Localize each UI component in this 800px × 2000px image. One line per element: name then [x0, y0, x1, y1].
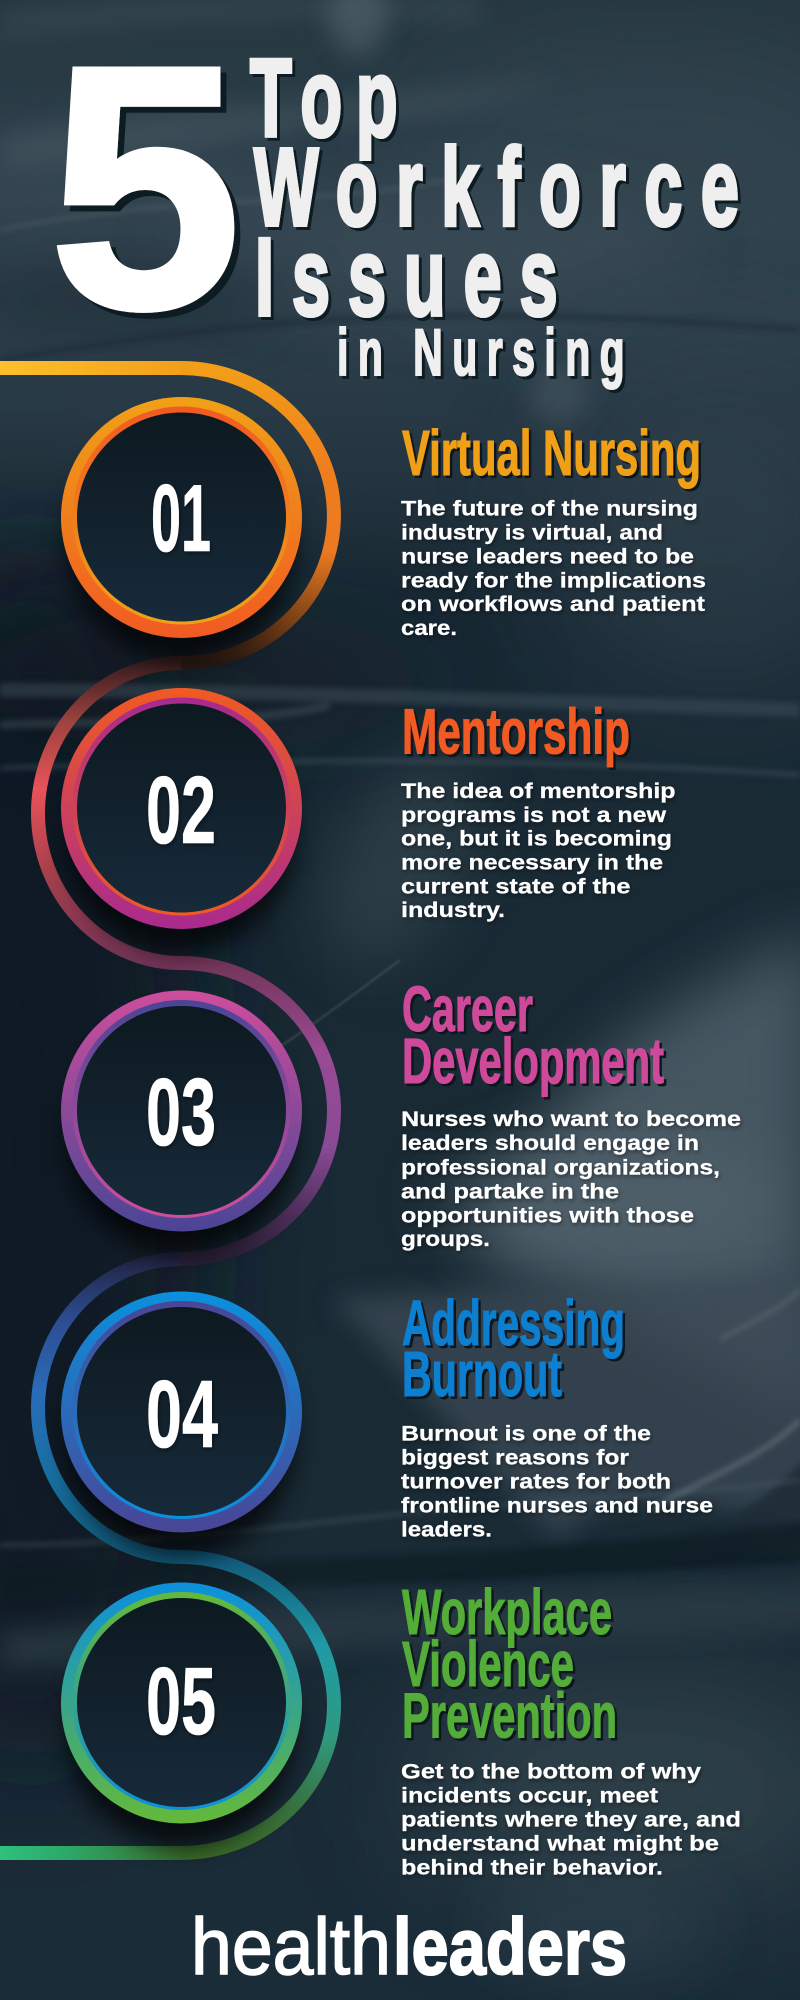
item 05: body: patients where they are, and	[401, 1808, 741, 1832]
item 04: body: turnover rates for both	[401, 1470, 671, 1494]
item 03: circle: 03	[146, 1059, 216, 1166]
title line: Workforce: Workforce	[254, 126, 739, 249]
item 02: body: one, but it is becoming	[401, 828, 672, 850]
item 01: body: The future of the nursing	[401, 498, 698, 520]
item 05: heading: Prevention	[402, 1680, 617, 1752]
logo: healthleaders: health	[191, 1902, 391, 1991]
item 03: heading: Career	[402, 973, 533, 1045]
item 04: circle: 04	[146, 1361, 218, 1468]
item 01: body: industry is virtual, and	[401, 522, 663, 544]
item 02: body	[401, 780, 676, 922]
title line: Top: Top	[250, 37, 398, 160]
item 02: heading: Mentorship	[402, 696, 630, 768]
item 03: heading	[402, 973, 664, 1097]
item 04: heading	[402, 1287, 625, 1410]
item 04: body: leaders.	[401, 1518, 492, 1542]
item 04: body	[401, 1422, 713, 1542]
title	[49, 0, 739, 389]
item 01: body: nurse leaders need to be	[401, 546, 694, 568]
item 03: body: opportunities with those	[401, 1204, 694, 1228]
title line: in Nursing: in Nursing	[337, 315, 625, 389]
item 05: body	[401, 1760, 741, 1880]
item 03: body: Nurses who want to become	[401, 1108, 741, 1131]
item 03: body: professional organizations,	[401, 1156, 720, 1180]
item 05: heading: Violence	[402, 1628, 574, 1700]
item 05: body: incidents occur, meet	[401, 1784, 658, 1808]
swirling gradient connector path	[0, 368, 334, 1853]
item 04: circle	[61, 1292, 302, 1532]
item 01: circle	[61, 397, 302, 638]
logo: healthleaders: leaders	[393, 1902, 627, 1991]
item 02: circle	[61, 688, 302, 929]
item 02: body: industry.	[401, 899, 505, 922]
item 01: body: on workflows and patient	[401, 593, 705, 616]
item 05: body: understand what might be	[401, 1832, 719, 1856]
item 04: heading: Addressing	[402, 1287, 625, 1359]
item 04: heading: Burnout	[402, 1338, 562, 1410]
circle drop shadows	[67, 429, 295, 1847]
logo: healthleaders	[191, 1902, 627, 1991]
item 02: body: The idea of mentorship	[401, 780, 676, 803]
item 02: body: current state of the	[401, 876, 630, 898]
item 01: circle: 01	[151, 465, 211, 572]
item 04: body: frontline nurses and nurse	[401, 1494, 713, 1518]
item 03: body: leaders should engage in	[401, 1132, 699, 1155]
item 04: body: Burnout is one of the	[401, 1422, 651, 1446]
item 02: body: more necessary in the	[401, 852, 663, 874]
item 03: body: and partake in the	[401, 1180, 619, 1204]
title line: Issues: Issues	[255, 216, 558, 339]
item 03: circle	[61, 990, 302, 1232]
item 05: circle	[61, 1582, 302, 1824]
title lines wrapper	[250, 37, 739, 389]
item 01: body: ready for the implications	[401, 570, 706, 592]
item 05: heading: Workplace	[402, 1576, 612, 1648]
big numeral 5: 5	[49, 0, 241, 381]
item 01: body: care.	[401, 617, 457, 640]
item 05: body: Get to the bottom of why	[401, 1760, 701, 1784]
item 02: body: programs is not a new	[401, 804, 667, 827]
item 02: circle: 02	[146, 757, 216, 864]
item 03: body	[401, 1108, 741, 1251]
item 05: circle: 05	[146, 1648, 216, 1755]
item 01: body	[401, 498, 706, 640]
item 03: body: groups.	[401, 1228, 490, 1251]
item 03: heading: Development	[402, 1025, 664, 1097]
item 04: body: biggest reasons for	[401, 1446, 629, 1470]
item 05: heading	[402, 1576, 617, 1752]
item 05: body: behind their behavior.	[401, 1856, 663, 1880]
